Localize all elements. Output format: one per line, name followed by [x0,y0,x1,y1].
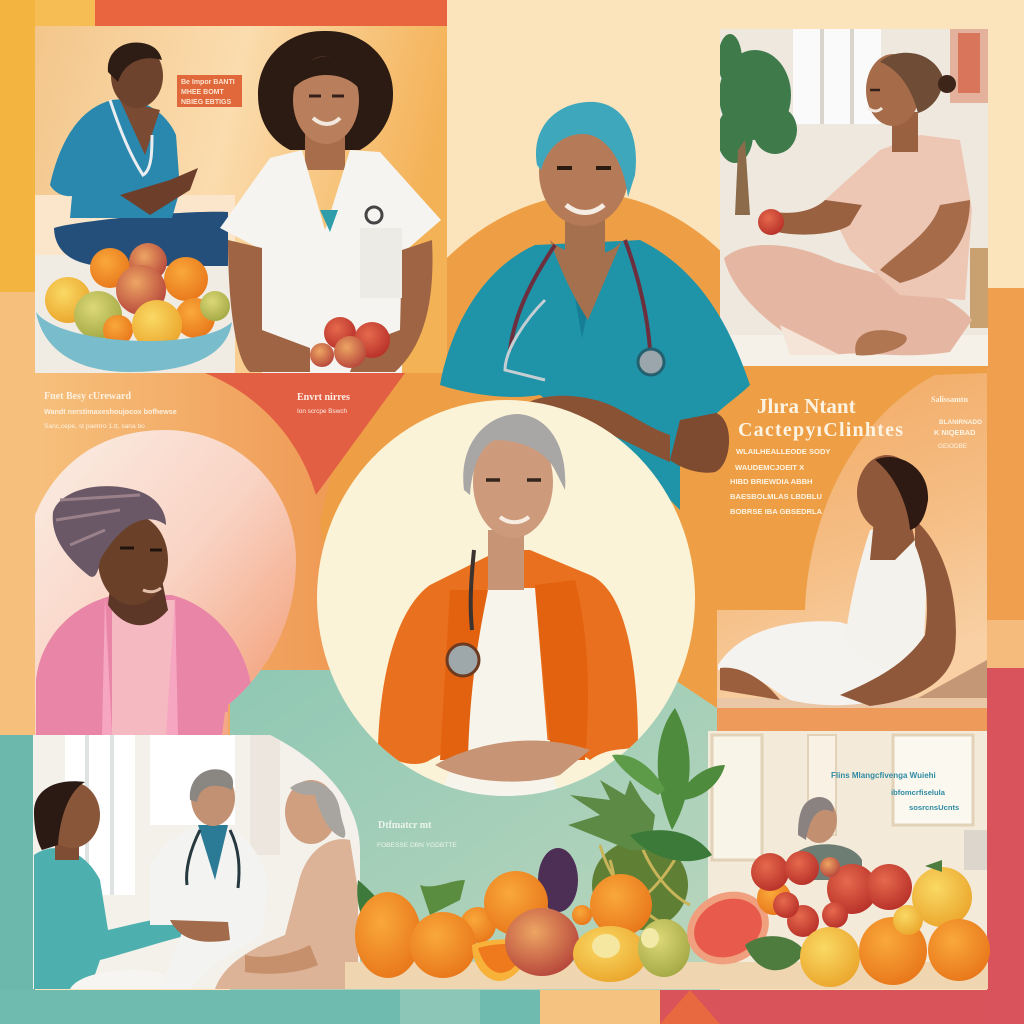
panel: left circle with woman [35,430,300,735]
panel: top left photo [35,26,447,373]
panel: bottom left photo [33,735,363,990]
fruit pile [355,851,990,987]
meditating woman holding apple [724,53,972,355]
text block: left upper [44,391,177,430]
text block: red wedge [297,392,350,415]
man in blue scrubs [50,42,228,266]
text block: right small: K NIQEBAD [934,428,976,437]
text block: red wedge: Envrt nirres [297,392,350,403]
text block: teal caption [831,771,959,812]
sign [177,75,242,107]
turban [536,102,636,197]
text block: right title [730,394,903,516]
orange central shape [320,193,987,708]
stethoscope [505,240,650,380]
text block: mint caption: FOBESSE DBN YGDBTTE [377,842,457,849]
red wedge [205,373,405,495]
central woman in orange jacket [378,414,638,796]
right panel woman in white tank [717,455,987,708]
text block: left upper: Fnet Besy cUreward [44,391,131,402]
seated woman [718,455,956,706]
fruit bowl [36,243,232,372]
text block: right title: BAESBOLMLAS LBDBLU [730,492,822,501]
plant [717,34,797,215]
panel: bottom right photo [708,731,988,966]
pineapple and leaves [357,708,725,930]
text block: mint caption: Dtfmatcr mt [378,820,432,831]
nurse left [34,781,188,989]
table surface [345,962,988,989]
text block: right small: GEIODBE [938,443,967,450]
text block: right small [931,395,982,450]
text block: right title: Jlıra Ntant [757,394,856,418]
text block: teal caption: sosrcnsUcnts [909,803,959,812]
nurse face features [557,168,611,212]
woman in white top [220,31,441,373]
panel: central circle [317,400,695,796]
woman in pink cardigan [36,486,252,735]
text block: right title: BOBRSE IBA GBSEDRLA [730,507,823,516]
sign: MHEE BOMT [181,89,224,96]
panel: right orange panel [717,373,987,708]
sign: Be Impor BANTI [181,79,235,86]
panel: central nurse [440,102,750,510]
text block: right title: CactepyıClinhtes [738,419,903,441]
doctor centre [150,769,258,942]
text block: mint caption [377,820,457,849]
text block: right title: WLAILHEALLEODE SODY [736,447,830,456]
text block: teal caption: ibfomcrfiselula [891,788,946,797]
text block: right title: HIBD BRIEWDIA ABBH [730,477,813,486]
text block: right small: Salissamtn [931,395,968,404]
older woman right [215,780,358,989]
text block: right title: WAUDEMCJOEIT X [735,463,804,472]
text block: red wedge: Ion scrcpe Bswch [297,408,348,415]
panel: top right photo [717,29,988,366]
text block: left upper: Wandt nerstimaxeshoujocox bofhewse [44,407,177,416]
text block: left upper: Sanc,cepe, st paetrro 1.tt, sana bo [44,423,145,430]
text block: teal caption: Flins Mlangcfivenga Wuiehi [831,771,936,780]
text block: right small: BLANIRNADO [939,419,982,426]
sign: NBIEG EBTIGS [181,99,232,106]
man [798,797,862,880]
